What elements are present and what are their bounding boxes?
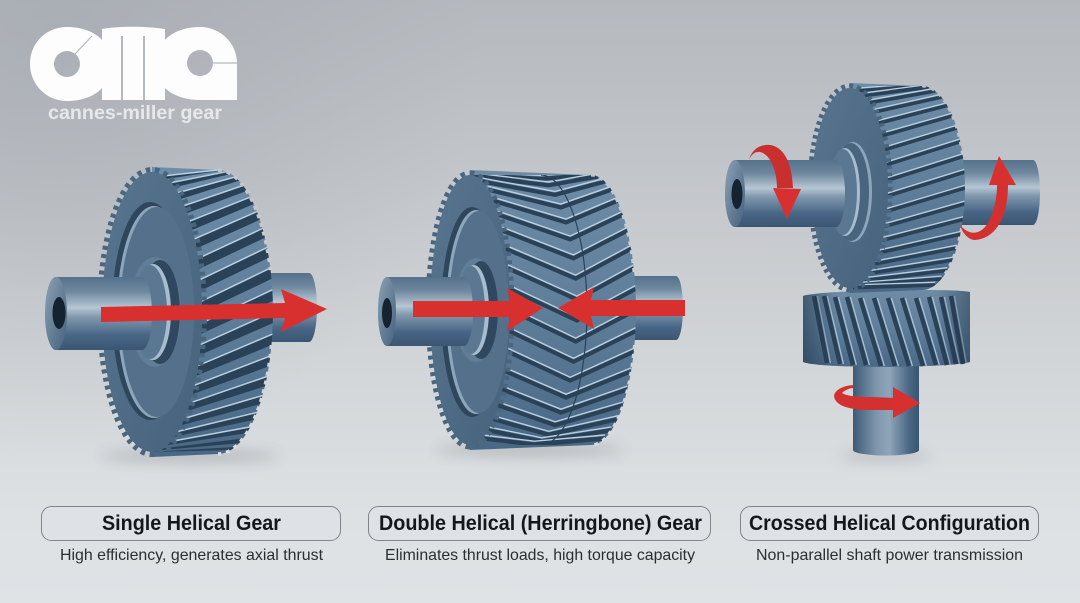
left shaft (378, 277, 473, 346)
helical teeth (152, 167, 273, 457)
panel: crossed helical configuration label (740, 506, 1038, 564)
hub (454, 258, 498, 362)
description: Non-parallel shaft power transmission (756, 547, 1023, 564)
right shaft stub (262, 273, 317, 342)
arrow: vertical shaft rotation (834, 385, 920, 418)
arrow: right thrust (558, 287, 685, 329)
title: Double Helical (Herringbone) Gear (379, 512, 702, 535)
title: Crossed Helical Configuration (749, 512, 1030, 535)
arrow: left shaft rotation (749, 145, 801, 219)
left shaft (45, 277, 152, 350)
upper helical teeth (850, 83, 965, 293)
gear illustration: double helical gear (378, 170, 685, 455)
description: Eliminates thrust loads, high torque capacity (385, 547, 695, 564)
herringbone teeth (470, 170, 636, 450)
gear illustration: single helical gear (45, 167, 327, 461)
logo wordmark: cannes-miller gear (48, 103, 223, 124)
title: Single Helical Gear (102, 512, 281, 535)
hub (829, 142, 872, 242)
right shaft (950, 160, 1040, 225)
arrow: axial thrust (101, 289, 327, 332)
description: High efficiency, generates axial thrust (60, 547, 324, 564)
title pill (42, 506, 340, 540)
panel: double helical gear label (368, 506, 710, 564)
upper gear face (812, 88, 888, 288)
title pill (368, 506, 710, 540)
gear illustration: crossed helical configuration (725, 83, 1040, 460)
left shaft (725, 160, 845, 227)
title pill (740, 506, 1038, 540)
arrow: right shaft rotation (960, 156, 1016, 240)
gear face (430, 175, 510, 445)
gear face (102, 172, 202, 452)
logo mark (30, 27, 237, 101)
arrow: left thrust (413, 288, 543, 331)
vertical shaft (853, 360, 919, 456)
lower helical gear (803, 290, 970, 367)
logo: cannes-miller gear (30, 27, 237, 124)
right shaft stub (625, 276, 683, 340)
hub (129, 257, 181, 367)
panel: single helical gear label (42, 506, 340, 564)
